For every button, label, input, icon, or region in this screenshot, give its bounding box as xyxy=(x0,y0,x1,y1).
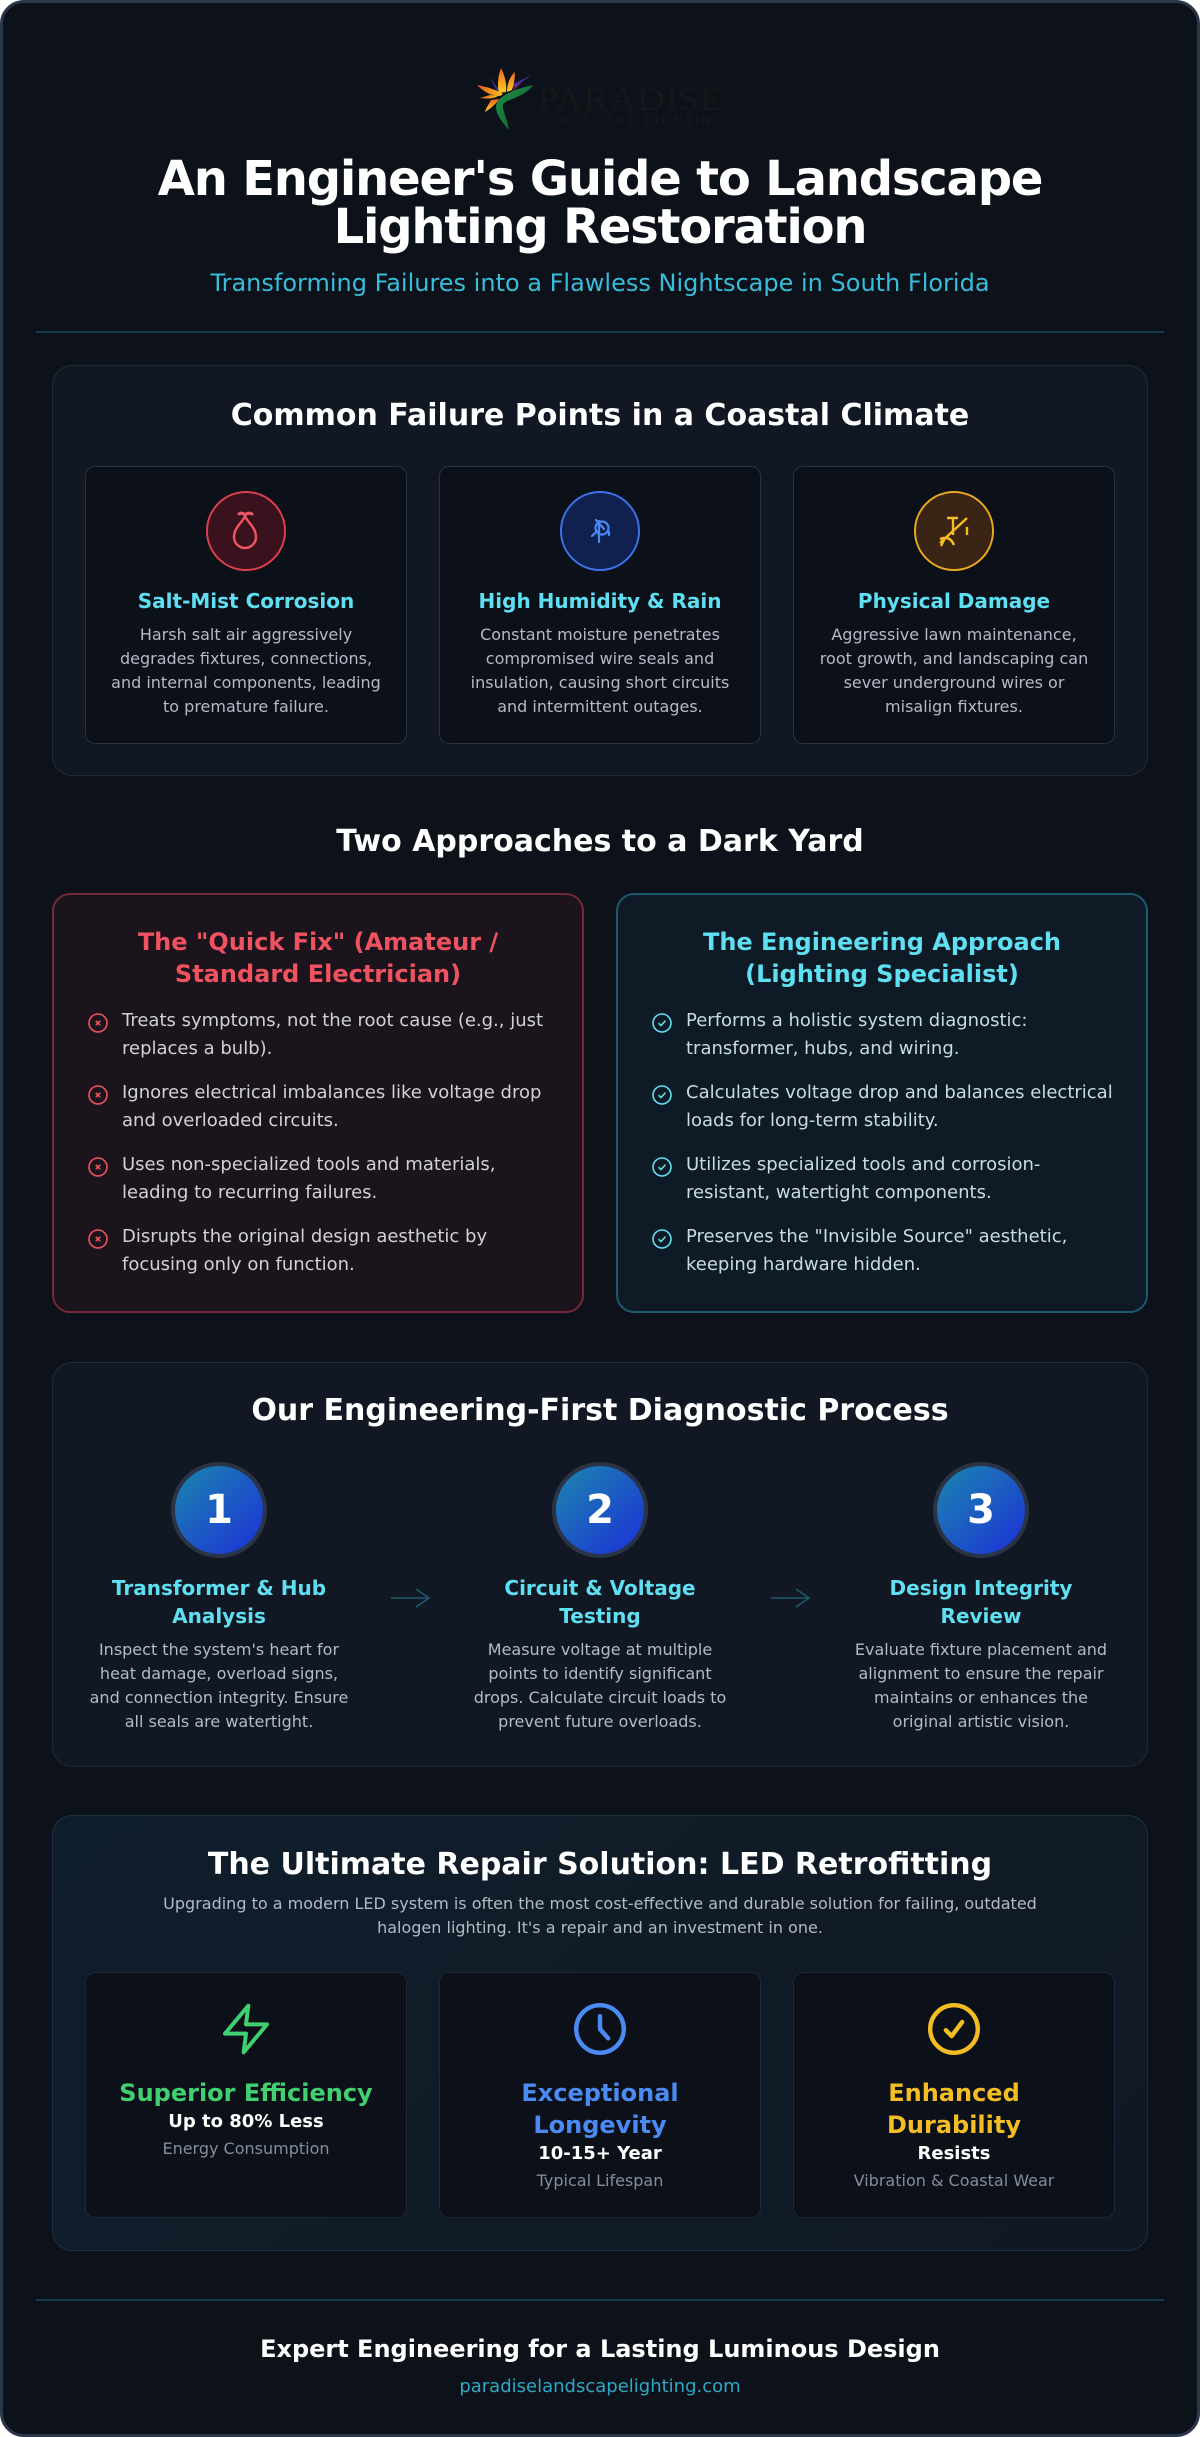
step text: prevent future overloads. xyxy=(498,1712,702,1731)
step text: all seals are watertight. xyxy=(125,1712,313,1731)
step text: original artistic vision. xyxy=(893,1712,1069,1731)
list item xyxy=(88,1226,487,1275)
benefit title: Longevity xyxy=(533,2111,667,2139)
intro text: Upgrading to a modern LED system is often the most cost-effective and durable solution for failing, outdated xyxy=(163,1894,1037,1913)
item text xyxy=(686,1010,1027,1059)
step 3 xyxy=(846,1462,1116,1747)
heading: diagnostic process: Our Engineering-First Diagnostic Process xyxy=(251,1393,949,1428)
benefit title: Durability xyxy=(887,2111,1021,2139)
icon: x circle xyxy=(88,1013,108,1033)
step text: Inspect the system's heart for xyxy=(99,1640,339,1659)
item text: loads for long-term stability. xyxy=(686,1110,939,1131)
benefit value: 10-15+ Year xyxy=(538,2143,662,2164)
list item xyxy=(88,1010,543,1059)
benefit title xyxy=(793,2077,1115,2141)
step text xyxy=(465,1638,735,1734)
logo: LANDSCAPE LIGHTING xyxy=(537,113,723,127)
item text: Preserves the "Invisible Source" aesthetic, xyxy=(686,1226,1067,1247)
panel: engineering approach xyxy=(616,893,1148,1313)
card text: Harsh salt air aggressively xyxy=(140,625,352,644)
step text: and connection integrity. Ensure xyxy=(90,1688,348,1707)
step text xyxy=(846,1638,1116,1734)
step title: Transformer & Hub xyxy=(112,1576,326,1600)
card text: and intermittent outages. xyxy=(497,697,703,716)
item text: Utilizes specialized tools and corrosion- xyxy=(686,1154,1040,1175)
intro text: halogen lighting. It's a repair and an investment in one. xyxy=(377,1918,823,1937)
list item xyxy=(652,1010,1027,1059)
icon: check circle xyxy=(926,2001,982,2057)
benefit title xyxy=(439,2077,761,2141)
step text xyxy=(90,1640,348,1731)
card text xyxy=(820,625,1088,716)
card title: Physical Damage xyxy=(858,589,1050,613)
icon: clock xyxy=(572,2001,628,2057)
list item xyxy=(652,1226,1067,1275)
arrow: step 2 to 3 xyxy=(770,1586,812,1610)
item text xyxy=(686,1226,1067,1275)
step title: Analysis xyxy=(172,1604,266,1628)
item text: Uses non-specialized tools and materials, xyxy=(122,1154,496,1175)
step text: drops. Calculate circuit loads to xyxy=(474,1688,726,1707)
logo xyxy=(477,68,723,130)
intro text xyxy=(52,1892,1148,1940)
title: An Engineer's Guide to Landscape xyxy=(158,151,1042,207)
benefit note: Vibration & Coastal Wear xyxy=(854,2171,1054,2190)
benefit value: Resists xyxy=(918,2143,990,2164)
step text: Measure voltage at multiple xyxy=(488,1640,712,1659)
title xyxy=(158,151,1042,255)
item text: and overloaded circuits. xyxy=(122,1110,339,1131)
panel: LED retrofitting xyxy=(52,1815,1148,2251)
step number xyxy=(552,1462,648,1558)
item text: leading to recurring failures. xyxy=(122,1182,377,1203)
step text: points to identify significant xyxy=(488,1664,712,1683)
list item xyxy=(652,1154,1040,1203)
item text: Calculates voltage drop and balances electrical xyxy=(686,1082,1113,1103)
arrow: step 1 to 2 xyxy=(391,1588,430,1608)
icon: x circle xyxy=(88,1085,108,1105)
step number xyxy=(171,1462,267,1558)
benefit note: Energy Consumption xyxy=(162,2139,330,2158)
icon: moisture xyxy=(560,491,640,571)
step number xyxy=(933,1462,1029,1558)
step text: Evaluate fixture placement and xyxy=(855,1640,1107,1659)
step title: Design Integrity xyxy=(890,1576,1072,1600)
title: Lighting Restoration xyxy=(334,199,866,255)
item text: transformer, hubs, and wiring. xyxy=(686,1038,960,1059)
step title: Circuit & Voltage xyxy=(504,1576,696,1600)
heading: two approaches: Two Approaches to a Dark Yard xyxy=(336,824,864,859)
panel: diagnostic process xyxy=(52,1362,1148,1767)
item text xyxy=(122,1226,487,1275)
list item xyxy=(652,1082,1113,1131)
item text xyxy=(686,1082,1113,1131)
icon: x circle xyxy=(88,1229,108,1249)
panel: common failure points xyxy=(52,365,1148,776)
icon: check circle xyxy=(652,1229,672,1249)
step number: 3 xyxy=(967,1487,995,1533)
card title: Salt-Mist Corrosion xyxy=(138,589,354,613)
card text: root growth, and landscaping can xyxy=(820,649,1088,668)
engineering title: The Engineering Approach xyxy=(703,928,1061,956)
step title: Review xyxy=(941,1604,1021,1628)
engineering title xyxy=(703,928,1061,988)
icon: lightning bolt xyxy=(218,2001,274,2057)
step text: heat damage, overload signs, xyxy=(100,1664,338,1683)
panel: quick fix xyxy=(52,893,584,1313)
step title xyxy=(504,1576,696,1628)
step text: alignment to ensure the repair xyxy=(858,1664,1104,1683)
card text: to premature failure. xyxy=(163,697,329,716)
step title: Testing xyxy=(559,1604,641,1628)
quick fix title: The "Quick Fix" (Amateur / xyxy=(138,928,498,956)
step 1 xyxy=(90,1462,348,1731)
icon: x circle xyxy=(88,1157,108,1177)
benefit title: Exceptional xyxy=(521,2079,679,2107)
benefit note: Typical Lifespan xyxy=(537,2171,663,2190)
step number: 2 xyxy=(586,1487,614,1533)
footer link: paradiselandscapelighting.com xyxy=(459,2376,741,2397)
card text: Constant moisture penetrates xyxy=(480,625,720,644)
item text: Disrupts the original design aesthetic by xyxy=(122,1226,487,1247)
card text: Aggressive lawn maintenance, xyxy=(831,625,1077,644)
heading: LED retrofitting: The Ultimate Repair Solution: LED Retrofitting xyxy=(208,1847,992,1882)
item text: Performs a holistic system diagnostic: xyxy=(686,1010,1027,1031)
step number: 1 xyxy=(205,1487,233,1533)
logo: PARADISE xyxy=(537,82,723,118)
item text xyxy=(122,1082,541,1131)
benefit title: Enhanced xyxy=(888,2079,1020,2107)
item text: resistant, watertight components. xyxy=(686,1182,992,1203)
card: longevity xyxy=(439,1972,761,2218)
card text: insulation, causing short circuits xyxy=(471,673,729,692)
card text: sever underground wires or xyxy=(844,673,1064,692)
step title xyxy=(112,1576,326,1628)
card: durability xyxy=(793,1972,1115,2218)
item text: replaces a bulb). xyxy=(122,1038,272,1059)
step text: maintains or enhances the xyxy=(874,1688,1088,1707)
item text: Treats symptoms, not the root cause (e.g., just xyxy=(122,1010,543,1031)
benefit title: Superior Efficiency xyxy=(119,2079,373,2107)
card text xyxy=(471,625,729,716)
card text: compromised wire seals and xyxy=(486,649,714,668)
list item xyxy=(88,1082,541,1131)
icon: check circle xyxy=(652,1157,672,1177)
icon: check circle xyxy=(652,1085,672,1105)
card text: misalign fixtures. xyxy=(885,697,1023,716)
icon: check circle xyxy=(652,1013,672,1033)
item text xyxy=(122,1010,543,1059)
card: physical damage xyxy=(793,466,1115,744)
step 2 xyxy=(474,1462,726,1731)
item text: keeping hardware hidden. xyxy=(686,1254,921,1275)
subtitle: Transforming Failures into a Flawless Nightscape in South Florida xyxy=(210,269,990,297)
quick fix title xyxy=(138,928,498,988)
icon: severed wire xyxy=(914,491,994,571)
footer tagline: Expert Engineering for a Lasting Luminous Design xyxy=(260,2335,940,2363)
item text xyxy=(122,1154,496,1203)
item text: Ignores electrical imbalances like voltage drop xyxy=(122,1082,541,1103)
icon: salt droplet xyxy=(206,491,286,571)
benefit value: Up to 80% Less xyxy=(168,2111,324,2132)
card text: degrades fixtures, connections, xyxy=(120,649,372,668)
card text xyxy=(111,625,381,716)
card: efficiency xyxy=(85,1972,407,2218)
item text xyxy=(686,1154,1040,1203)
list item xyxy=(88,1154,496,1203)
card: salt-mist corrosion xyxy=(85,466,407,744)
step title xyxy=(846,1574,1116,1630)
card title: High Humidity & Rain xyxy=(479,589,721,613)
item text: focusing only on function. xyxy=(122,1254,355,1275)
engineering title: (Lighting Specialist) xyxy=(745,960,1019,988)
card text: and internal components, leading xyxy=(111,673,381,692)
heading: failure points: Common Failure Points in a Coastal Climate xyxy=(231,398,969,433)
card: humidity and rain xyxy=(439,466,761,744)
quick fix title: Standard Electrician) xyxy=(175,960,461,988)
